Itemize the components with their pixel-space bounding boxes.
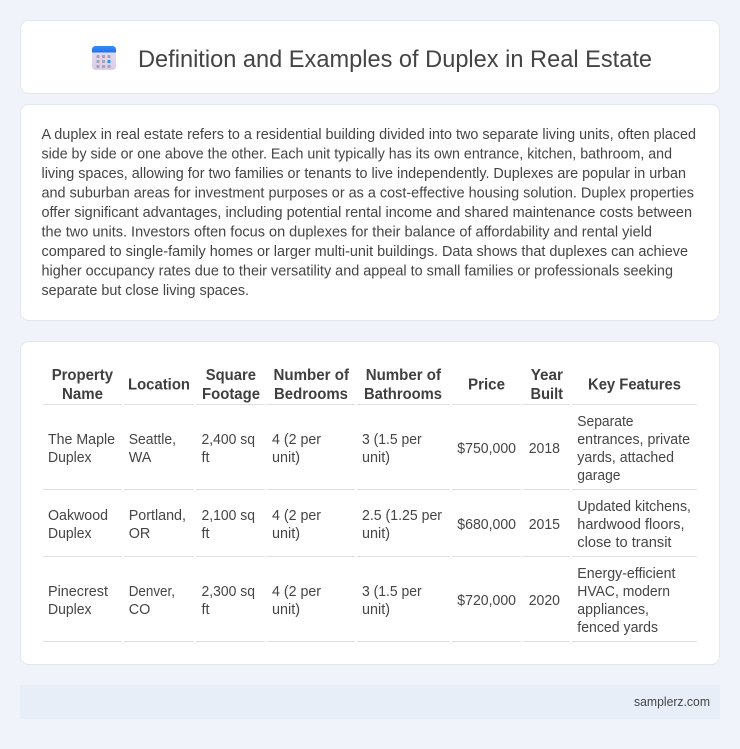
- table row: The Maple Duplex: entrances, private: [577, 432, 690, 448]
- table row: Pinecrest Duplex: ft: [202, 602, 210, 618]
- table row: Pinecrest Duplex: 2,300 sq: [202, 584, 255, 600]
- table row: Oakwood Duplex: [43, 499, 697, 557]
- table row: Oakwood Duplex: close to transit: [577, 535, 672, 551]
- table row: The Maple Duplex: 3 (1.5 per: [362, 432, 422, 448]
- table header row: Key Features: [588, 376, 681, 394]
- description paragraph: A duplex in real estate refers to a residential building divided into two separate living units, often placed: [42, 127, 696, 143]
- table row: The Maple Duplex: 2018: [529, 441, 560, 457]
- table row: Pinecrest Duplex: Denver,: [129, 584, 175, 600]
- table header row: Number of: [274, 367, 350, 384]
- table header row: Square: [206, 367, 256, 384]
- table row: The Maple Duplex: yards, attached: [577, 450, 674, 466]
- table row: Pinecrest Duplex: CO: [129, 602, 150, 618]
- table row: Oakwood Duplex: Oakwood: [48, 508, 108, 524]
- table row: Oakwood Duplex: Duplex: [48, 526, 92, 542]
- table row: The Maple Duplex: garage: [577, 468, 620, 484]
- table row: The Maple Duplex: unit): [272, 450, 300, 466]
- table row: The Maple Duplex: 2,400 sq: [202, 432, 255, 448]
- table row: Pinecrest Duplex: Energy-efficient: [577, 566, 676, 582]
- table header row: [43, 367, 697, 405]
- table header row: Number of: [366, 367, 442, 384]
- table header row: Location: [128, 376, 190, 394]
- table row: Pinecrest Duplex: [43, 566, 697, 642]
- table row: Oakwood Duplex: unit): [362, 526, 390, 542]
- table row: Pinecrest Duplex: Duplex: [48, 602, 92, 618]
- table header row: Built: [530, 386, 564, 403]
- table row: Pinecrest Duplex: 4 (2 per: [272, 584, 321, 600]
- description paragraph: and suburban areas for investment purposes or as a cost-effective housing solution. Duplex properties: [42, 186, 694, 202]
- panel: header: [20, 20, 720, 94]
- description paragraph: offer significant advantages, including potential rental income and shared maintenance costs between: [42, 205, 692, 221]
- table row: Pinecrest Duplex: 2020: [529, 593, 560, 609]
- table header row: Year: [531, 367, 563, 384]
- description paragraph: separate but close living spaces.: [42, 283, 249, 299]
- table row: The Maple Duplex: 4 (2 per: [272, 432, 321, 448]
- table row: Pinecrest Duplex: fenced yards: [577, 620, 658, 636]
- panel: property table: [20, 342, 720, 664]
- table row: Oakwood Duplex: 2015: [529, 517, 560, 533]
- table row: Oakwood Duplex: Updated kitchens,: [577, 499, 691, 515]
- description paragraph: compared to single-family homes or larger multi-unit buildings. Data shows that duplexes can achieve: [42, 244, 688, 260]
- table header row: Price: [468, 376, 505, 394]
- panel: description: [20, 104, 720, 320]
- table row: Oakwood Duplex: 2.5 (1.25 per: [362, 508, 442, 524]
- table row: Oakwood Duplex: 2,100 sq: [202, 508, 255, 524]
- table row: Oakwood Duplex: Portland,: [129, 508, 186, 524]
- table row: The Maple Duplex: unit): [362, 450, 390, 466]
- table row: Oakwood Duplex: unit): [272, 526, 300, 542]
- table row: Oakwood Duplex: $680,000: [457, 517, 516, 533]
- icon: calendar: [92, 46, 116, 70]
- description paragraph: the two units. Investors often focus on duplexes for their balance of affordability and rental yield: [42, 224, 652, 240]
- title: Definition and Examples of Duplex in Real Estate: [138, 46, 652, 73]
- table row: Oakwood Duplex: 4 (2 per: [272, 508, 321, 524]
- table row: Pinecrest Duplex: $720,000: [457, 593, 516, 609]
- table row: The Maple Duplex: WA: [129, 450, 152, 466]
- table row: Pinecrest Duplex: Pinecrest: [48, 584, 108, 600]
- table row: Oakwood Duplex: OR: [129, 526, 150, 542]
- table row: The Maple Duplex: Duplex: [48, 450, 92, 466]
- table row: Oakwood Duplex: ft: [202, 526, 210, 542]
- description paragraph: side by side or one above the other. Each unit typically has its own entrance, kitchen, bathroom, and: [42, 146, 672, 162]
- table header row: Bathrooms: [364, 386, 442, 403]
- description paragraph: living spaces, allowing for two families or tenants to live independently. Duplexes are popular in urban: [42, 166, 686, 182]
- table row: Pinecrest Duplex: appliances,: [577, 602, 649, 618]
- table row: Oakwood Duplex: hardwood floors,: [577, 517, 684, 533]
- table row: Pinecrest Duplex: 3 (1.5 per: [362, 584, 422, 600]
- footer bar: [20, 685, 720, 719]
- table header row: Bedrooms: [274, 386, 348, 403]
- description paragraph: higher occupancy rates due to their versatility and appeal to small families or professionals seeking: [42, 264, 673, 280]
- table row: Pinecrest Duplex: HVAC, modern: [577, 584, 670, 600]
- table row: The Maple Duplex: The Maple: [48, 432, 115, 448]
- table row: Pinecrest Duplex: unit): [362, 602, 390, 618]
- table row: Pinecrest Duplex: unit): [272, 602, 300, 618]
- table row: The Maple Duplex: [43, 414, 697, 490]
- table row: The Maple Duplex: ft: [202, 450, 210, 466]
- table header row: Name: [62, 386, 103, 403]
- table row: The Maple Duplex: Seattle,: [129, 432, 176, 448]
- table row: The Maple Duplex: Separate: [577, 414, 634, 430]
- table row: The Maple Duplex: $750,000: [457, 441, 516, 457]
- footer source text: samplerz.com: [634, 694, 710, 709]
- description paragraph: [42, 127, 696, 299]
- table header row: Property: [52, 367, 113, 384]
- table header row: Footage: [202, 386, 260, 403]
